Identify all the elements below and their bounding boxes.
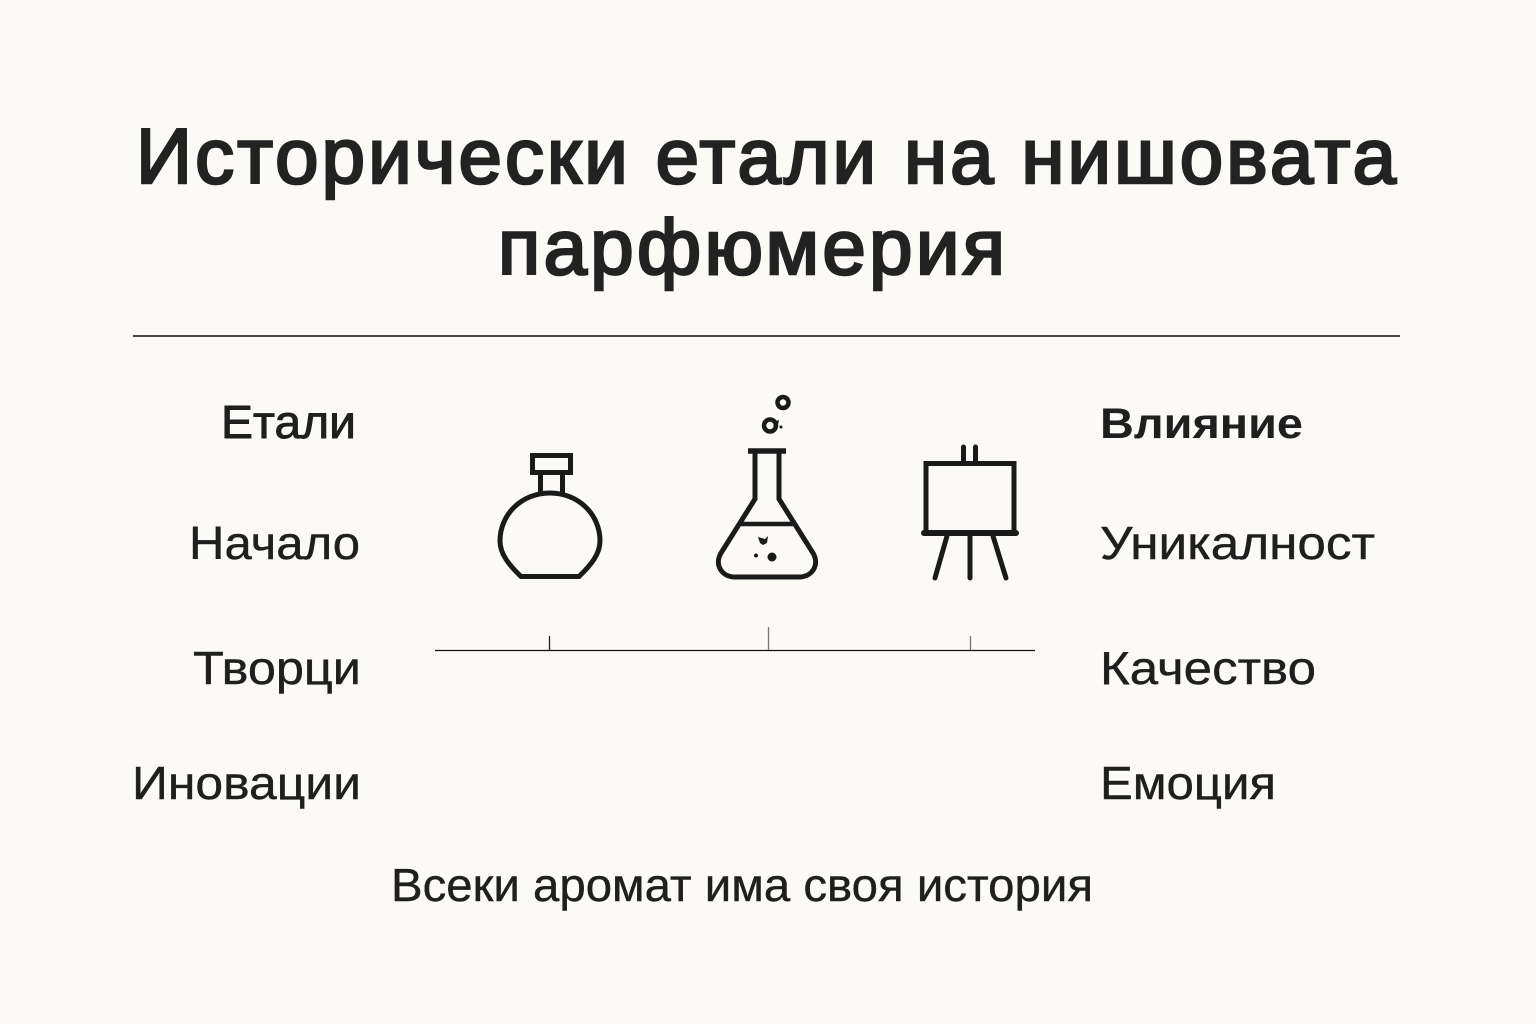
left column labels: Етали <box>221 396 356 448</box>
left column labels: Иновации <box>132 757 361 809</box>
icon: laboratory flask <box>718 397 816 577</box>
right column labels <box>1100 400 1375 809</box>
left column labels: Начало <box>189 517 360 569</box>
right column labels: Влияние <box>1100 400 1303 448</box>
footer tagline: Всеки аромат има своя история <box>391 859 1093 911</box>
icon: perfume bottle <box>500 456 600 576</box>
right column labels: Емоция <box>1100 757 1276 809</box>
title: Исторически етали на нишовата <box>136 112 1397 200</box>
right column labels: Уникалност <box>1100 517 1375 569</box>
left column labels <box>132 396 361 809</box>
title <box>136 112 1397 291</box>
left column labels: Творци <box>193 642 361 694</box>
timeline <box>435 627 1035 650</box>
right column labels: Качество <box>1100 642 1316 694</box>
icon: easel <box>924 447 1016 578</box>
title: парфюмерия <box>498 203 1005 291</box>
